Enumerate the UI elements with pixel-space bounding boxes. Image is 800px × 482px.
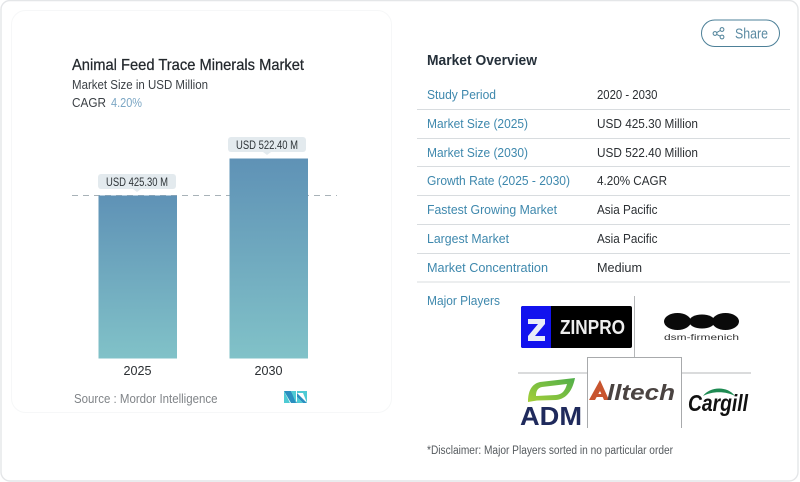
row: study period xyxy=(427,87,658,102)
share button xyxy=(702,20,780,46)
row: market size 2030 xyxy=(427,145,698,160)
row: market size 2025: Market Size (2025) xyxy=(427,116,528,131)
label: 2030 value: USD 522.40 M xyxy=(236,140,298,152)
logo: Alltech box xyxy=(588,358,682,428)
row: market size 2025: USD 425.30 Million xyxy=(597,116,698,131)
panel: major player logos xyxy=(518,296,751,431)
logo: Cargill: Cargill xyxy=(688,390,749,416)
row: fastest growing market xyxy=(427,202,658,217)
logo: dsm-firmenich: dsm-firmenich xyxy=(664,332,739,342)
logo: ADM: ADM xyxy=(520,401,582,431)
row: market size 2025 xyxy=(427,116,698,131)
logo: ADM xyxy=(520,378,582,431)
row: fastest growing market: Asia Pacific xyxy=(597,202,658,217)
CAGR: CAGR xyxy=(72,95,106,110)
panel: market size chart xyxy=(12,10,392,412)
row: market size 2030: Market Size (2030) xyxy=(427,145,528,160)
disclaimer: *Disclaimer: Major Players sorted in no particular order xyxy=(427,445,673,457)
icon: Mordor logo xyxy=(284,391,307,403)
logo grid lines xyxy=(518,296,751,373)
bar 2030 xyxy=(228,137,308,358)
logo: dsm-firmenich xyxy=(664,313,739,342)
logo: Zinpro xyxy=(521,306,632,348)
CAGR xyxy=(72,95,142,110)
row: market concentration: Market Concentration xyxy=(427,260,548,275)
heading: market overview: Market Overview xyxy=(427,53,538,69)
row: growth rate: Growth Rate (2025 - 2030) xyxy=(427,173,570,188)
row: market concentration: Medium xyxy=(597,260,642,275)
chart card xyxy=(12,10,392,412)
label: 2030 value xyxy=(228,137,306,155)
row: major players label: Major Players xyxy=(427,293,500,308)
row: market concentration xyxy=(427,260,642,275)
row: growth rate xyxy=(427,173,667,188)
logo: Zinpro: ZINPRO xyxy=(560,317,625,339)
icon: share xyxy=(713,28,724,39)
row: fastest growing market: Fastest Growing Market xyxy=(427,202,557,217)
row: largest market: Asia Pacific xyxy=(597,231,658,246)
axis label 2030: 2030 xyxy=(254,363,282,378)
share button: Share xyxy=(735,26,768,42)
panel: overview table xyxy=(417,87,790,308)
source: Source : Mordor Intelligence xyxy=(74,392,218,406)
row: largest market xyxy=(427,231,658,246)
logo: Alltech box: lltech xyxy=(607,380,675,405)
reference dashed line xyxy=(72,194,337,196)
subtitle: Market Size in USD Million xyxy=(72,77,208,92)
row: largest market: Largest Market xyxy=(427,231,509,246)
row: study period: Study Period xyxy=(427,87,496,102)
title: Animal Feed Trace Minerals Market xyxy=(72,57,305,74)
row: growth rate: 4.20% CAGR xyxy=(597,173,667,188)
label: 2025 value: USD 425.30 M xyxy=(106,177,168,189)
axis label 2025: 2025 xyxy=(124,363,152,378)
CAGR: 4.20% xyxy=(111,95,142,110)
row: study period: 2020 - 2030 xyxy=(597,87,658,102)
bar 2025 xyxy=(98,174,177,358)
row: market size 2030: USD 522.40 Million xyxy=(597,145,698,160)
label: 2025 value xyxy=(98,174,176,192)
